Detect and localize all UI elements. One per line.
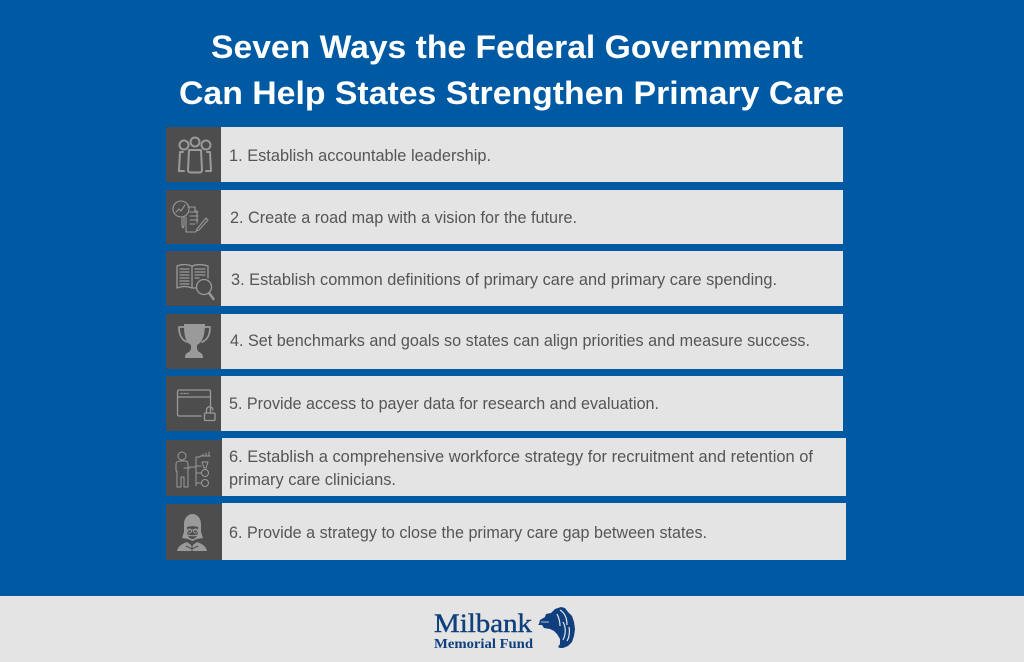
item 5 text: 5. Provide access to payer data for research and evaluation.	[229, 395, 659, 413]
logo wordmark: Milbank	[434, 609, 532, 638]
icon: open book with magnifier	[177, 264, 214, 299]
panel: item 6	[166, 438, 846, 496]
item 1 text: 1. Establish accountable leadership.	[229, 147, 491, 165]
logo: lion head	[538, 607, 575, 648]
panel: item 3	[166, 251, 843, 306]
title	[179, 29, 844, 111]
icon: group of people	[179, 138, 211, 172]
panel: item 4	[166, 314, 843, 369]
item 4 text: 4. Set benchmarks and goals so states can align priorities and measure success.	[230, 332, 810, 350]
logo wordmark	[434, 609, 533, 652]
panel: item 1	[166, 127, 843, 182]
panel: item 5	[166, 376, 843, 431]
item 6 text: 6. Establish a comprehensive workforce strategy for recruitment and retention of	[229, 448, 813, 466]
footer band	[0, 596, 1024, 662]
icon: report with chart and pencil	[173, 201, 208, 232]
logo wordmark: Memorial Fund	[434, 637, 533, 652]
panel: item 7	[166, 503, 846, 560]
icon: clinician portrait	[177, 514, 207, 551]
panel: item 2	[166, 190, 843, 244]
title: Can Help States Strengthen Primary Care	[179, 75, 844, 111]
item 7 text: 6. Provide a strategy to close the primary care gap between states.	[229, 524, 707, 542]
item 6 text: primary care clinicians.	[229, 471, 396, 489]
item 6 text	[229, 448, 813, 489]
icon: trophy	[179, 324, 210, 358]
title: Seven Ways the Federal Government	[211, 29, 803, 65]
item 3 text: 3. Establish common definitions of primary care and primary care spending.	[231, 271, 777, 289]
icon: browser window with lock	[178, 390, 215, 420]
item 2 text: 2. Create a road map with a vision for the future.	[230, 209, 577, 227]
icon: person with workflow chart	[176, 452, 210, 487]
